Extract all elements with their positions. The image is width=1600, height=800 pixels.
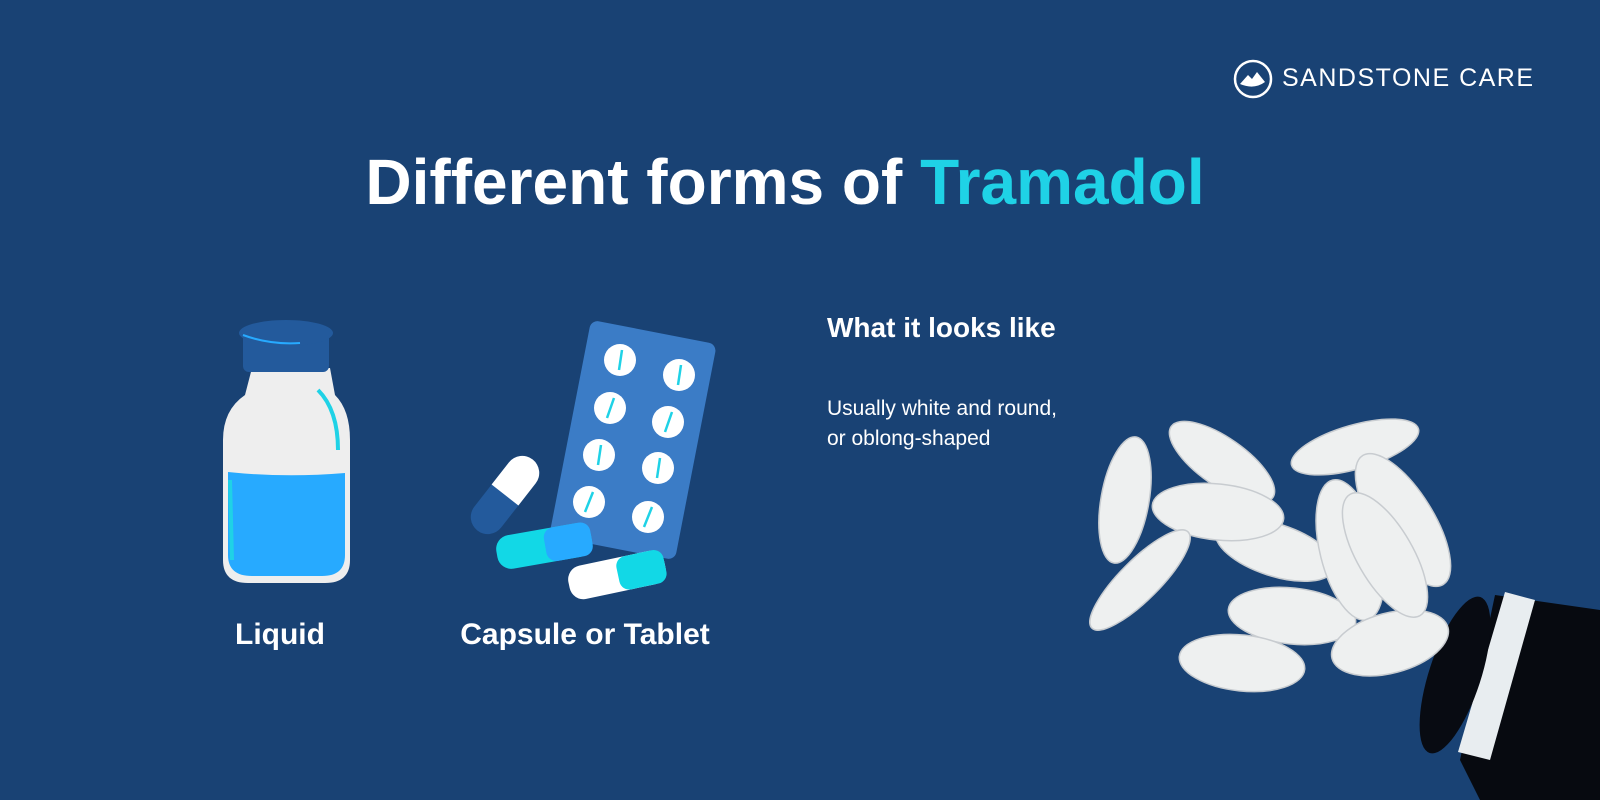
photo: pills spilling from bottle — [1089, 418, 1600, 800]
logo — [1234, 60, 1535, 98]
label: Capsule or Tablet: Capsule or Tablet — [460, 618, 710, 651]
logo: SANDSTONE CARE — [1282, 64, 1535, 92]
text: description: or oblong-shaped — [827, 427, 990, 450]
icon: blister pack and capsules — [470, 321, 716, 600]
heading: What it looks like: What it looks like — [827, 312, 1056, 343]
label: Liquid: Liquid — [235, 618, 325, 651]
icon: liquid bottle — [223, 320, 350, 583]
text: description: Usually white and round, — [827, 397, 1057, 420]
text: description — [827, 397, 1057, 450]
title: Different forms of Tramadol — [365, 146, 1205, 218]
